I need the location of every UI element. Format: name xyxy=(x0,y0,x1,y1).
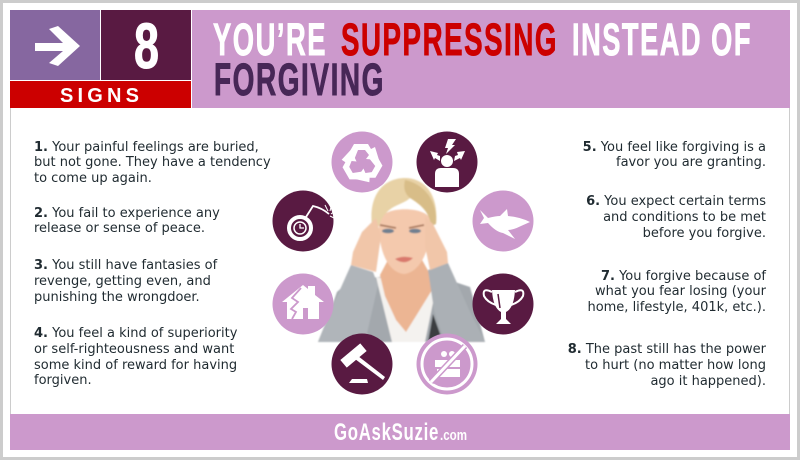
header: number 8 tile xyxy=(101,10,191,82)
sign 2: 2. You fail to experience any xyxy=(34,206,220,221)
sign 8: ago it happened). xyxy=(650,374,766,389)
icon: no gifts xyxy=(416,334,478,394)
sign 5: 5. You feel like forgiving is a xyxy=(583,140,766,155)
sign 8: to hurt (no matter how long xyxy=(585,358,766,373)
icon: recycle xyxy=(332,132,392,192)
icon: arrow xyxy=(35,26,80,66)
icon: shark xyxy=(472,190,534,252)
header: signs label: SIGNS xyxy=(60,85,139,107)
sign 1: but not gone. They have a tendency xyxy=(34,155,271,170)
title banner: FORGIVING xyxy=(214,54,385,105)
icon: trophy xyxy=(472,274,534,334)
title banner: SUPPRESSING xyxy=(341,14,558,65)
sign 3: punishing the wrongdoer. xyxy=(34,290,200,305)
sign 1: 1. Your painful feelings are buried, xyxy=(34,140,259,155)
sign 6: 6. You expect certain terms xyxy=(586,194,766,209)
title banner: YOU’RE xyxy=(213,14,327,65)
footer banner: GoAskSuzie xyxy=(334,419,439,446)
icon: gavel xyxy=(332,334,392,394)
sign 4: some kind of reward for having xyxy=(34,358,237,373)
title banner xyxy=(192,10,790,108)
sign 6: before you forgive. xyxy=(643,226,766,241)
sign 8: 8. The past still has the power xyxy=(568,342,766,357)
icon: bomb with clock xyxy=(272,190,336,252)
sign 4: or self-righteousness and want xyxy=(34,342,234,357)
photo: stressed woman xyxy=(318,178,485,342)
header: number 8 tile: 8 xyxy=(134,10,159,82)
sign 7: home, lifestyle, 401k, etc.). xyxy=(587,300,766,315)
sign 4: forgiven. xyxy=(34,373,92,388)
footer banner: .com xyxy=(440,427,467,444)
icon: person with lightning xyxy=(416,132,478,192)
sign 3: revenge, getting even, and xyxy=(34,274,211,289)
header: arrow tile xyxy=(10,10,100,80)
sign 4: 4. You feel a kind of superiority xyxy=(34,326,237,341)
footer banner xyxy=(10,414,790,450)
sign 2: release or sense of peace. xyxy=(34,221,205,236)
header: signs label xyxy=(10,81,191,108)
sign 3: 3. You still have fantasies of xyxy=(34,258,217,273)
sign 6: and conditions to be met xyxy=(603,210,766,225)
text block: signs 5 to 8 xyxy=(568,140,767,389)
sign 1: to come up again. xyxy=(34,171,152,186)
sign 5: favor you are granting. xyxy=(616,155,766,170)
sign 7: what you fear losing (your xyxy=(595,284,767,299)
sign 7: 7. You forgive because of xyxy=(601,269,766,284)
text block: signs 1 to 4 xyxy=(34,140,271,388)
icon: broken house xyxy=(272,274,334,334)
